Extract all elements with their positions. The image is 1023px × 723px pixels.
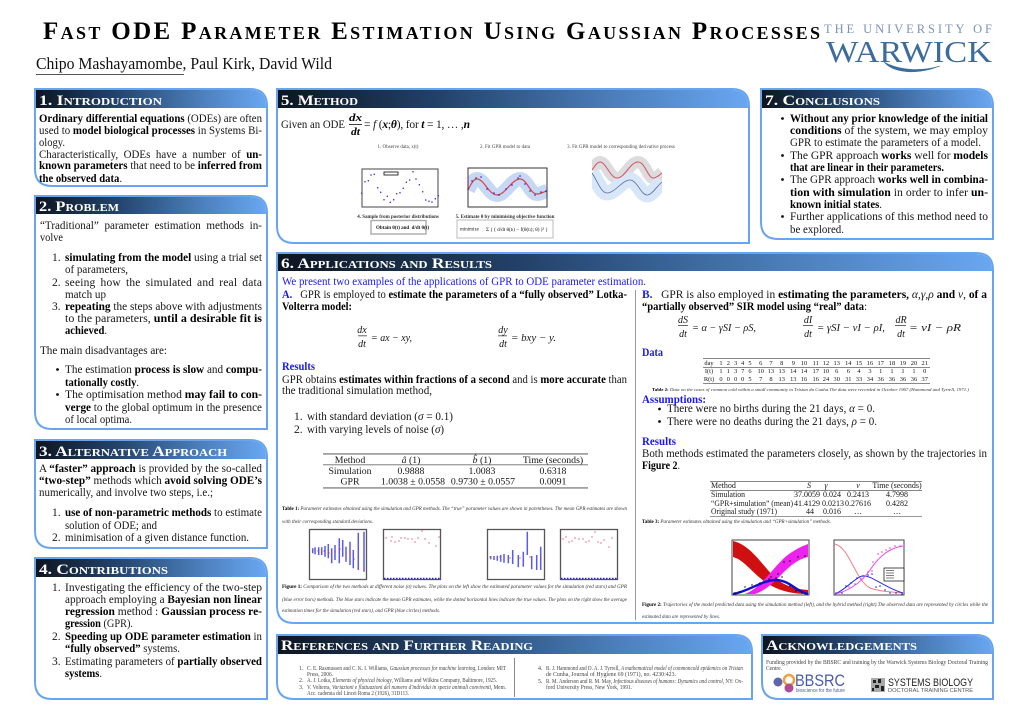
table 3: Original study (1971) — [711, 507, 777, 516]
chart: observe data: 1. Observe data, x(t) — [378, 145, 419, 150]
table 3: γ — [824, 481, 828, 490]
table 1: â (1) — [402, 455, 420, 466]
text block: problem list: 1. — [52, 252, 61, 264]
table 2: 8 — [769, 376, 773, 383]
table 3: 37.0059 — [794, 490, 820, 499]
panel: 1. Introduction — [35, 89, 267, 186]
equation: given an ODE: Given an ODE — [281, 119, 345, 131]
table 2: 7 — [769, 360, 773, 367]
table 3: 44 — [806, 507, 814, 516]
text block: introduction: the observed data. — [39, 173, 122, 185]
table 1: 1.0038 ± 0.0558 — [381, 476, 445, 488]
table 2: 5 — [748, 376, 752, 383]
chart: figure 1 times low noise — [384, 530, 441, 580]
text block: introduction: Ordinary differential equations (ODEs) are often — [39, 113, 262, 125]
callout: sample from posterior: Obtain θ(t) and d/dt θ(t) — [376, 226, 429, 231]
logo: BBSRC: BBSRC — [795, 672, 845, 690]
chart: figure 1 estimates low noise — [310, 530, 366, 580]
text block: problem list: simulating from the model using a trial set — [65, 252, 263, 264]
table 2: 10 — [823, 368, 829, 375]
heading: 3. Alternative Approach: 3. Alternative Approach — [39, 444, 228, 460]
equation: SIR model: dt — [897, 329, 905, 340]
text block: introduction: known parameters that need to be inferred from — [39, 160, 262, 172]
equation: given an ODE: = f (x;θ), for t = 1, … ,n — [364, 119, 470, 131]
text block: conclusions: tion with simulation in order to infer un- — [790, 187, 988, 199]
text block: contributions: regression method : Gaussian process re- — [65, 606, 262, 618]
heading: 6. Applications and Results: 6. Applications and Results — [281, 256, 492, 272]
table 2: 4 — [857, 368, 861, 375]
equation: SIR model: = γSI − νI − ρI, — [817, 323, 885, 334]
table 2: 7 — [759, 376, 763, 383]
text block: contributions: 2. — [52, 631, 61, 643]
authors: Chipo Mashayamombe, Paul Kirk, David Wild — [36, 54, 332, 73]
panel: 6. Applications and Results — [277, 253, 993, 623]
text block: references right column: 4. — [538, 666, 543, 672]
text block: problem list: repeating the steps above with adjustments — [65, 301, 263, 313]
table 1: 0.0091 — [540, 476, 567, 488]
equation: SIR model — [678, 315, 962, 340]
text block: introduction: used to model biological processes in Systems Bi- — [39, 125, 262, 137]
table 2: 14 — [845, 360, 852, 367]
table 2: 0 — [741, 376, 744, 383]
table 2: 5 — [748, 360, 752, 367]
text block: contributions: 3. — [52, 656, 61, 668]
heading: 7. Conclusions: 7. Conclusions — [765, 93, 880, 109]
table 3: 4.7998 — [886, 490, 908, 499]
text block: conclusions: that are linear in their parameters. — [790, 162, 944, 174]
heading: 2. Problem: 2. Problem — [39, 199, 120, 215]
table 2: 6 — [759, 360, 762, 367]
table 1: Time (seconds) — [523, 455, 583, 466]
table 2: 0 — [923, 368, 926, 375]
table 2: 2 — [727, 360, 730, 367]
callout: estimate theta: minimize — [460, 228, 480, 232]
equation: given an ODE: dt — [351, 127, 361, 138]
text block: conclusions: conditions of the system, we may employ — [790, 125, 988, 137]
text block: assumptions: There were no births during the 21 days, α = 0. — [667, 403, 875, 415]
text block: conclusions: The GPR approach works well for models — [790, 150, 989, 162]
table 3: 0.27616 — [845, 499, 871, 508]
table 1: 1.0083 — [469, 466, 496, 477]
text block: disadvantages: of local optima. — [65, 414, 132, 426]
text block: results A: Results — [282, 361, 315, 373]
table 3: Time (seconds) — [872, 481, 922, 490]
equation: SIR model: dt — [804, 329, 812, 340]
text block: part B: “partially observed” SIR model using “real” data: — [642, 301, 867, 313]
caption: table 3: Table 3: Parameter estimates obtained using the simulation and “GPR+simulation” methods. — [642, 518, 831, 525]
text block: intro sentence: We present two examples of the applications of GPR to ODE parameter estimation. — [282, 276, 646, 288]
text block: problem list: match up — [65, 289, 106, 301]
text block: contributions: 1. — [52, 582, 61, 594]
title: Fast ODE Parameter Estimation Using Gaussian Processes — [43, 18, 820, 45]
table 2: 13 — [779, 376, 785, 383]
table 2: 12 — [823, 360, 829, 367]
heading: acknowledgements: Acknowledgements — [766, 638, 917, 654]
text block: conclusions: Without any prior knowledge of the initial — [790, 113, 988, 125]
equation: Lotka-Volterra: dt — [358, 339, 366, 350]
text block: contributions: Estimating parameters of partially observed — [65, 656, 263, 668]
table 2: R(t) — [704, 376, 714, 383]
table 2: 10 — [801, 360, 807, 367]
logo: Systems Biology DTC: SYSTEMS BIOLOGY — [888, 677, 974, 689]
chart: SIR trajectories simulation — [732, 540, 809, 595]
table 2: 18 — [889, 360, 895, 367]
text block: references right column: de Cunha, Journal of Hygiene 69 (1971), no. 4230:423. — [546, 671, 676, 678]
text block: problem list — [40, 220, 263, 337]
panel: references — [277, 635, 752, 699]
table 2: 11 — [813, 360, 819, 367]
text block: references right column: R. M. Anderson and R. M. May, Infectious diseases of humans: Dynamics and control, NY: Ox- — [546, 678, 743, 685]
equation: given an ODE: dx — [349, 113, 362, 124]
equation: SIR model: dt — [679, 329, 687, 340]
text block: results A: with varying levels of noise (σ) — [307, 424, 444, 436]
table 2: 10 — [758, 368, 764, 375]
table 3 — [710, 481, 922, 517]
text block: disadvantages: The optimisation method may fail to con- — [65, 389, 262, 401]
text block: problem list: achieved. — [65, 325, 107, 337]
table 2: 13 — [834, 360, 840, 367]
text block: conclusions: known initial states. — [790, 199, 882, 211]
text block: alternative approach: numerically, and involve two steps, i.e.; — [39, 487, 213, 499]
table 2: 24 — [823, 376, 830, 383]
heading: references: References and Further Reading — [281, 638, 533, 654]
table 2: 1 — [727, 368, 730, 375]
table 2: I(t) — [705, 368, 713, 375]
table 2: 17 — [878, 360, 885, 367]
text block: problem list: to the parameters, until a desirable fit is — [65, 313, 263, 325]
text block: results A: GPR obtains estimates within fractions of a second and is more accurate than — [282, 374, 627, 386]
text block: references left column: C. E. Rasmussen and C. K. I. Williams, Gaussian processes for machine learning, London: MIT — [307, 665, 506, 672]
text block: disadvantages: The main disadvantages are: — [40, 345, 167, 357]
chart: SIR trajectories hybrid — [834, 540, 904, 595]
table 2: 13 — [779, 368, 785, 375]
callout: estimate theta: 5. Estimate θ by minimising objective function — [456, 215, 555, 220]
table 2: 3 — [868, 368, 872, 375]
table 1 — [323, 453, 588, 488]
text block: references left column: 1. — [299, 666, 304, 672]
table 2: 15 — [856, 360, 862, 367]
text block: references left column: V. Volterra, Variazioni e fluttuazioni del numero d'individui in specie animali conviventi, Mem. — [307, 684, 506, 691]
table 2: 16 — [801, 376, 807, 383]
text block: introduction: ology. — [39, 137, 65, 149]
text block: problem list: seeing how the simulated and real data — [65, 277, 262, 289]
table 3: 0.4282 — [886, 499, 908, 508]
text block: problem list: 3. — [52, 301, 61, 313]
text block: disadvantages — [40, 345, 262, 426]
text block: introduction — [39, 113, 262, 185]
table 2: 14 — [801, 368, 808, 375]
equation: Lotka-Volterra: = bxy − y. — [511, 333, 556, 344]
text block: conclusions: The GPR approach works well in combina- — [790, 174, 988, 186]
table 2: 3 — [734, 360, 737, 367]
text block: conclusions: GPR to estimate the parameters of a model. — [790, 137, 981, 149]
equation: SIR model: dR — [895, 315, 907, 326]
equation: SIR model: = νI − ρR — [909, 323, 962, 334]
table 2: 1 — [890, 368, 894, 375]
text block: contributions: gression (GPR). — [65, 618, 133, 630]
table 3: 0.0213 — [822, 499, 844, 508]
table 3: S — [807, 481, 811, 490]
table 2: 33 — [856, 376, 862, 383]
text block: funding: Centre. — [766, 666, 782, 672]
table 2: 30 — [834, 376, 840, 383]
text block: assumptions — [642, 394, 877, 428]
heading: 1. Introduction: 1. Introduction — [39, 93, 162, 109]
text block: part A: A. GPR is employed to estimate the parameters of a “fully observed” Lotka- — [282, 289, 627, 301]
text block: results B — [642, 436, 987, 472]
chart: GPR fit — [468, 145, 547, 207]
chart: observe data — [362, 145, 438, 207]
panel: 5. Method — [277, 89, 749, 243]
logo: University of Warwick: THE UNIVERSITY OF — [824, 22, 992, 36]
logo: Systems Biology DTC — [871, 677, 974, 694]
text block: assumptions: Assumptions: — [642, 394, 706, 406]
table 2: 34 — [867, 376, 874, 383]
text block: results B: Results — [642, 436, 676, 448]
text block: alternative approach: solution of ODE; and — [65, 520, 157, 532]
table 2: 36 — [900, 376, 906, 383]
table 2: 16 — [867, 360, 873, 367]
chart: derivative process: 3. Fit GPR model to corresponding derivative process — [567, 145, 675, 150]
caption: figure 1 — [282, 583, 628, 614]
logo: BBSRC: bioscience for the future — [796, 688, 845, 694]
table 3: 0.016 — [823, 507, 841, 516]
text block: alternative approach: A “faster” approach is provided by the so-called — [39, 463, 262, 475]
text block: conclusions: be explored. — [790, 224, 844, 236]
table 2: 8 — [780, 360, 783, 367]
logo: BBSRC — [774, 672, 845, 694]
text block: alternative approach: use of non-parametric methods to estimate — [65, 507, 262, 519]
table 3: 41.4129 — [794, 499, 820, 508]
text block: contributions — [52, 582, 263, 680]
text block: conclusions — [781, 113, 989, 236]
text block: part A: Volterra model: — [282, 301, 352, 313]
table 2: 17 — [813, 368, 820, 375]
text block: alternative approach — [39, 463, 262, 544]
table 1: 0.6318 — [540, 466, 567, 477]
text block: results A: 2. — [294, 424, 303, 436]
text block: contributions: “fully observed” systems. — [65, 643, 180, 655]
panel: 3. Alternative Approach — [35, 440, 267, 548]
logo: University of Warwick — [824, 22, 993, 72]
table 2: 13 — [768, 368, 774, 375]
text block: introduction: Characteristically, ODEs have a number of un- — [39, 149, 262, 161]
equation: SIR model: = α − γSI − ρS, — [692, 323, 756, 334]
table 3: Method — [711, 481, 736, 490]
text block: results A — [282, 361, 627, 436]
caption: table 1 — [282, 505, 627, 525]
text block: results A: 1. — [294, 411, 303, 423]
text block: disadvantages: verge to the global optimum in the presence — [65, 402, 262, 414]
text block: disadvantages: The estimation process is slow and compu- — [65, 364, 262, 376]
table 2: 37 — [922, 376, 929, 383]
equation: Lotka-Volterra: dt — [499, 339, 507, 350]
text block: alternative approach: “two-step” methods which avoid solving ODE’s — [39, 475, 262, 487]
logo: Systems Biology DTC: DOCTORAL TRAINING CENTRE — [888, 688, 973, 694]
table 2: 7 — [741, 368, 745, 375]
heading: Data: Data — [642, 347, 663, 359]
table 2: 13 — [790, 376, 796, 383]
table 2: 36 — [911, 376, 917, 383]
text block: assumptions: There were no deaths during the 21 days, ρ = 0. — [667, 416, 877, 428]
caption: table 2: Table 2: Data on the cases of common cold within a small community in Tristan da Cunha.The data were recorded in October 1967 (Hammond and Tyrrell, 1971.) — [652, 387, 969, 393]
table 2: day — [704, 360, 714, 367]
table 2: 9 — [792, 360, 795, 367]
equation: Lotka-Volterra — [357, 325, 556, 350]
text block: funding — [766, 660, 988, 672]
logo: University of Warwick: WARWICK — [826, 34, 993, 69]
chart: figure 1 estimates high noise — [488, 530, 544, 580]
text block: references left column: 2. — [299, 678, 304, 684]
table 2: 1 — [879, 368, 882, 375]
equation: Lotka-Volterra: dy — [498, 325, 508, 336]
equation: given an ODE — [281, 113, 470, 138]
text block: references left column: Acc. cademia del Lincei Roma 2 (1926), 31D113. — [307, 690, 409, 697]
table 1: GPR — [340, 476, 360, 488]
equation: Lotka-Volterra: = ax − xy, — [371, 333, 412, 344]
text block: contributions: Investigating the efficiency of the two-step — [65, 582, 262, 594]
table 1: 0.9730 ± 0.0557 — [451, 476, 515, 488]
text block: problem list: volve — [40, 232, 63, 244]
table 2: 6 — [835, 368, 838, 375]
chart: GPR fit: 2. Fit GPR model to data — [480, 145, 531, 150]
text block: references left column: 3. — [299, 685, 304, 691]
table 2: 0 — [719, 376, 723, 383]
chart: figure 1 times high noise — [560, 530, 618, 580]
panel: acknowledgements — [762, 635, 993, 699]
text block: part B: B. GPR is also employed in estimating the parameters, α,γ,ρ and ν, of a — [642, 289, 987, 301]
text block: references left column: Press, 2006. — [307, 672, 333, 678]
caption: figure 2: estimated data are represented by lines. — [642, 614, 720, 620]
callout: estimate theta: Σ { ( d/dt θ(ti) − f(θ(ti); θ) )² } — [486, 226, 548, 233]
heading: 4. Contributions: 4. Contributions — [39, 562, 168, 578]
equation: SIR model: dS — [678, 315, 688, 326]
table 3: … — [854, 507, 862, 516]
text block: references right column: 5. — [538, 679, 543, 685]
table 2: 21 — [922, 360, 928, 367]
text block: contributions: approach employing a Bayesian non linear — [65, 594, 262, 606]
text block: results A: with standard deviation (σ = 0.1) — [307, 411, 453, 423]
table 2: 1 — [719, 368, 723, 375]
text block: contributions: Speeding up ODE parameter estimation in — [65, 631, 262, 643]
text block: contributions: systems. — [65, 668, 102, 680]
table 2: 0 — [734, 376, 737, 383]
caption: figure 1: (blue error bars) methods. The blue stars indicate the mean GPR estimates, while the dotted horizontal lines indicate the true values. The plots on the right show the average — [282, 596, 628, 603]
table 2: 14 — [790, 368, 797, 375]
table 2: 1 — [912, 368, 916, 375]
table 2: 1 — [901, 368, 905, 375]
callout: sample from posterior: 4. Sample from posterior distributions — [357, 215, 439, 220]
table 3: 0.024 — [823, 490, 841, 499]
table 1: Method — [335, 455, 365, 466]
panel: 2. Problem — [35, 196, 267, 429]
heading: 5. Method: 5. Method — [281, 93, 358, 109]
table 3: … — [893, 507, 901, 516]
text block: results A: the traditional simulation method, — [282, 385, 432, 397]
table 2: 6 — [847, 368, 850, 375]
text block: conclusions: Further applications of this method need to — [790, 211, 988, 223]
table 1: b̂ (1) — [473, 453, 491, 466]
text block: references right column — [538, 665, 743, 691]
text block: results B: Figure 2. — [642, 460, 680, 472]
text block: problem list: 2. — [52, 277, 61, 289]
table 2: 0 — [727, 376, 730, 383]
text block: alternative approach: 2. — [52, 532, 61, 544]
table 2: 1 — [719, 360, 723, 367]
callout: estimate theta — [456, 215, 555, 238]
table 2 — [703, 358, 930, 384]
text block: part A — [282, 289, 627, 313]
text block: references left column — [299, 665, 506, 697]
table 2: 6 — [748, 368, 752, 375]
text block: references right column: ford University Press, New York, 1991. — [546, 684, 632, 691]
table 2: 4 — [741, 360, 745, 367]
equation: Lotka-Volterra: dx — [357, 325, 367, 336]
caption: figure 2: Figure 2: Trajectories of the model predicted data using the simulation method (left), and the hybrid method (right).The observed data are represented by circles while the — [642, 601, 989, 608]
table 2: 36 — [878, 376, 884, 383]
caption: figure 2 — [642, 601, 989, 620]
table 1: 0.9888 — [398, 466, 425, 477]
text block: alternative approach: 1. — [52, 507, 61, 519]
text block: references right column: B. J. Hammond and D. A. J. Tyrrell, A mathematical model of commoncold epidemics on Tristan — [546, 665, 743, 672]
table 3: 0.2413 — [847, 490, 869, 499]
text block: results B: Both methods estimated the parameters closely, as shown by the trajectories in — [642, 448, 987, 460]
caption: figure 1: Figure 1: Comparison of the two methods at different noise (σ) values. The plots on the left show the estimated parameter values for the simulation (red stars) and GPR — [282, 583, 628, 590]
table 2: 20 — [911, 360, 917, 367]
text block: alternative approach: minimisation of a given distance function. — [65, 532, 249, 544]
table 1: Simulation — [328, 466, 372, 477]
equation: SIR model: dI — [804, 315, 813, 326]
table 2: 36 — [889, 376, 895, 383]
text block: problem list: “Traditional” parameter estimation methods in- — [40, 220, 262, 232]
text block: problem list: of parameters, — [65, 264, 128, 276]
text block: funding: Funding provided by the BBSRC and training by the Warwick Systems Biology Doctoral Training — [766, 660, 988, 666]
panel: 4. Contributions — [35, 558, 267, 699]
table 3: Simulation — [711, 490, 745, 499]
text block: disadvantages: tationally costly. — [65, 377, 139, 389]
table 2: 31 — [845, 376, 851, 383]
table 2: 16 — [813, 376, 819, 383]
caption: table 1: with their corresponding standard deviations. — [282, 519, 373, 525]
text block: part B — [642, 289, 987, 313]
text block: references left column: A. J. Lotka, Elements of physical biology, Williams and Wilkins Company, Baltimore, 1925. — [307, 677, 497, 684]
table 3: ν — [856, 481, 860, 490]
table 3: “GPR+simulation” (mean) — [711, 499, 793, 508]
caption: figure 1: estimation times for the simulation (red stars), and GPR (blue circles) methods. — [282, 607, 440, 614]
table 2: 19 — [900, 360, 906, 367]
callout: sample from posterior — [357, 215, 439, 234]
panel: 7. Conclusions — [761, 89, 993, 239]
chart: derivative process — [567, 145, 675, 195]
table 2: 3 — [734, 368, 737, 375]
caption: table 1: Table 1: Parameter estimates obtained using the simulation and GPR methods. The “true” parameter values are shown in parentheses. The mean GPR estimates are shown — [282, 505, 627, 512]
